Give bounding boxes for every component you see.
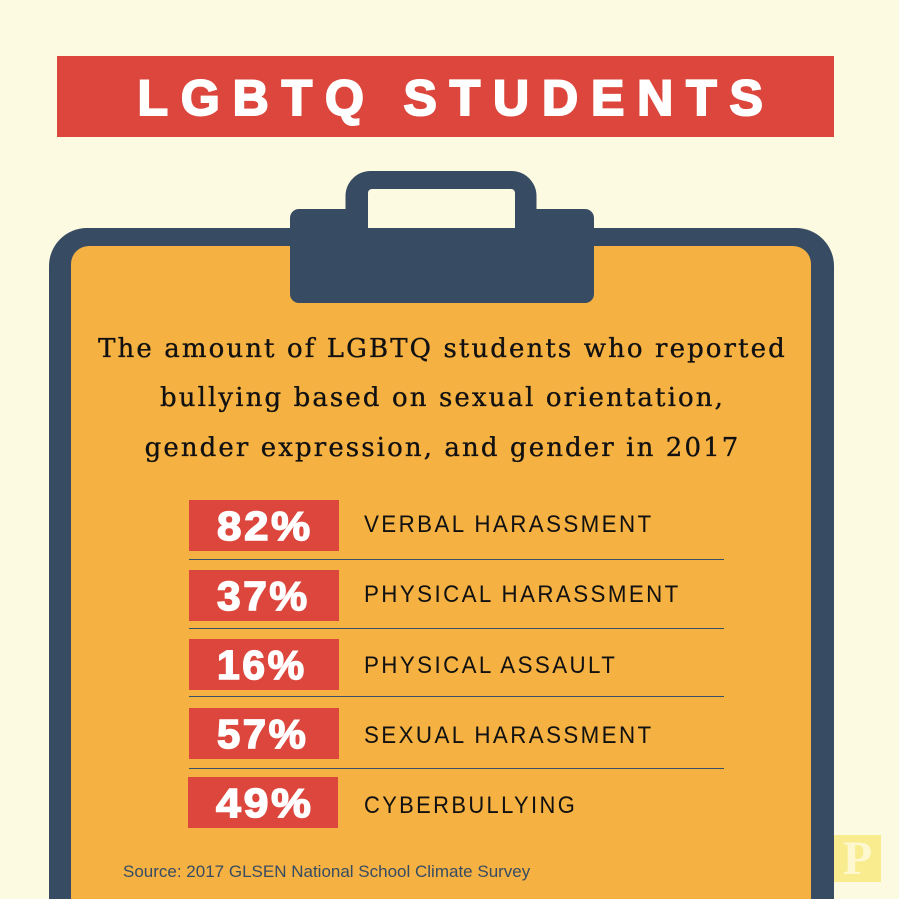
stat: cyberbullying: 49% [216,780,314,826]
stat: sexual harassment: 57% [217,710,308,756]
stat: cyberbullying [188,777,577,828]
stat: verbal harassment: VERBAL HARASSMENT [364,511,654,538]
description text: bullying based on sexual orientation, [160,383,725,413]
stat: physical harassment [189,570,724,629]
title banner: LGBTQ STUDENTS [138,70,776,126]
stat: cyberbullying: CYBERBULLYING [364,792,577,819]
stat: verbal harassment [189,500,724,560]
stat: physical assault: PHYSICAL ASSAULT [364,652,617,678]
stat: sexual harassment [189,708,724,769]
logo [834,835,881,882]
stat: physical assault [189,639,724,697]
description text [98,334,787,463]
logo: P [843,832,872,885]
stat: physical harassment: 37% [217,572,310,618]
stat: sexual harassment: SEXUAL HARASSMENT [364,722,654,748]
description text: gender expression, and gender in 2017 [145,433,740,463]
stat: physical assault: 16% [217,642,307,688]
stat: verbal harassment: 82% [217,503,313,549]
stat: physical harassment: PHYSICAL HARASSMENT [364,580,681,608]
title banner [57,56,834,137]
source note: Source: 2017 GLSEN National School Climate Survey [123,862,530,881]
description text: The amount of LGBTQ students who reported [98,334,787,364]
